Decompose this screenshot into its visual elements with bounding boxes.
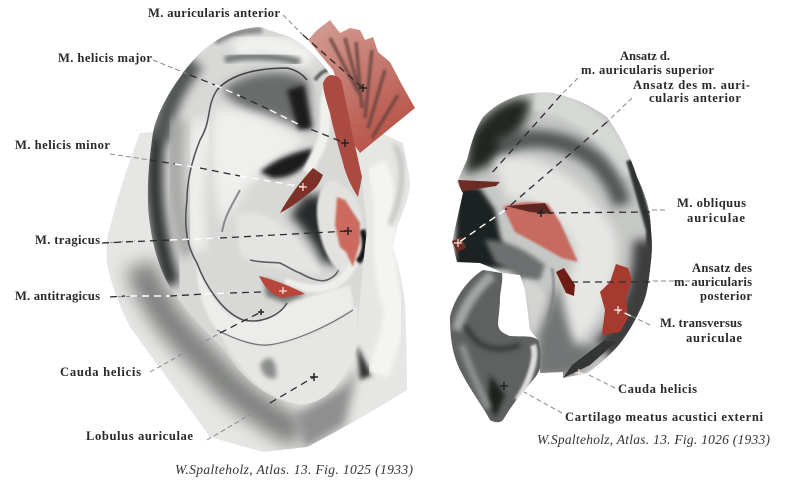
label: Cauda helicis: Cauda helicis xyxy=(60,365,141,379)
label: M. auricularis anterior: M. auricularis anterior xyxy=(148,6,280,20)
label: M. helicis minor: M. helicis minor xyxy=(15,138,110,152)
outer helix shading xyxy=(154,130,172,285)
label: Ansatz des m. auricularis anterior: cularis anterior xyxy=(649,91,741,105)
illustration: cranial/medial view of ear cartilage xyxy=(445,78,690,425)
upper fossa xyxy=(222,72,312,130)
caption: Fig. 1025: W.Spalteholz, Atlas. 13. Fig. 1025 (1933) xyxy=(175,462,414,477)
muscle: auricularis anterior xyxy=(308,20,415,153)
contour lines xyxy=(186,90,287,321)
cavum conchae shade xyxy=(290,195,340,265)
muscle: antitragicus xyxy=(259,276,305,298)
label: Ansatz des m. auricularis posterior: posterior xyxy=(700,289,752,303)
antihelix crura xyxy=(308,78,335,172)
label: Lobulus auriculae: Lobulus auriculae xyxy=(86,429,193,443)
label: Ansatz des m. auricularis anterior: Ansatz des m. auri- xyxy=(633,78,750,92)
caption: Fig. 1026: W.Spalteholz, Atlas. 13. Fig. 1026 (1933) xyxy=(537,432,770,447)
label: M. obliquus auriculae: M. obliquus xyxy=(677,196,746,210)
labels: left figure xyxy=(15,6,414,477)
label: Ansatz des m. auricularis posterior: m. auricularis xyxy=(674,275,752,289)
muscle: tragicus xyxy=(335,197,360,267)
labels: right figure xyxy=(537,49,770,447)
label: Cartilago meatus acustici externi: Cartilago meatus acustici externi xyxy=(565,410,764,424)
muscle: helicis minor xyxy=(280,168,323,213)
label: M. helicis major: M. helicis major xyxy=(58,51,152,65)
tragus xyxy=(317,180,363,275)
label: Ansatz d. m. auricularis superior: m. auricularis superior xyxy=(581,63,714,77)
label: M. obliquus auriculae: auriculae xyxy=(687,211,745,225)
cavum upper xyxy=(211,109,305,225)
main cartilage body xyxy=(452,92,652,378)
ear cartilage body xyxy=(148,27,367,405)
surrounding tissue xyxy=(106,132,410,452)
muscle patches xyxy=(452,180,632,335)
label: Cauda helicis: Cauda helicis xyxy=(618,382,697,396)
label: Ansatz des m. auricularis posterior: Ansatz des xyxy=(692,261,752,275)
lobule and tail xyxy=(217,305,358,405)
label: M. antitragicus: M. antitragicus xyxy=(15,289,100,303)
label: Ansatz d. m. auricularis superior: Ansatz d. xyxy=(620,49,670,63)
tragus cartilage xyxy=(450,270,540,422)
illustration: external ear, lateral view xyxy=(100,15,415,460)
label: M. transversus auriculae: auriculae xyxy=(686,331,742,345)
leader lines, right figure xyxy=(454,78,690,413)
muscle: helicis major xyxy=(323,75,362,197)
label: M. transversus auriculae: M. transversus xyxy=(660,316,742,330)
leader lines, left figure xyxy=(102,15,367,440)
label: M. tragicus: M. tragicus xyxy=(35,233,100,247)
